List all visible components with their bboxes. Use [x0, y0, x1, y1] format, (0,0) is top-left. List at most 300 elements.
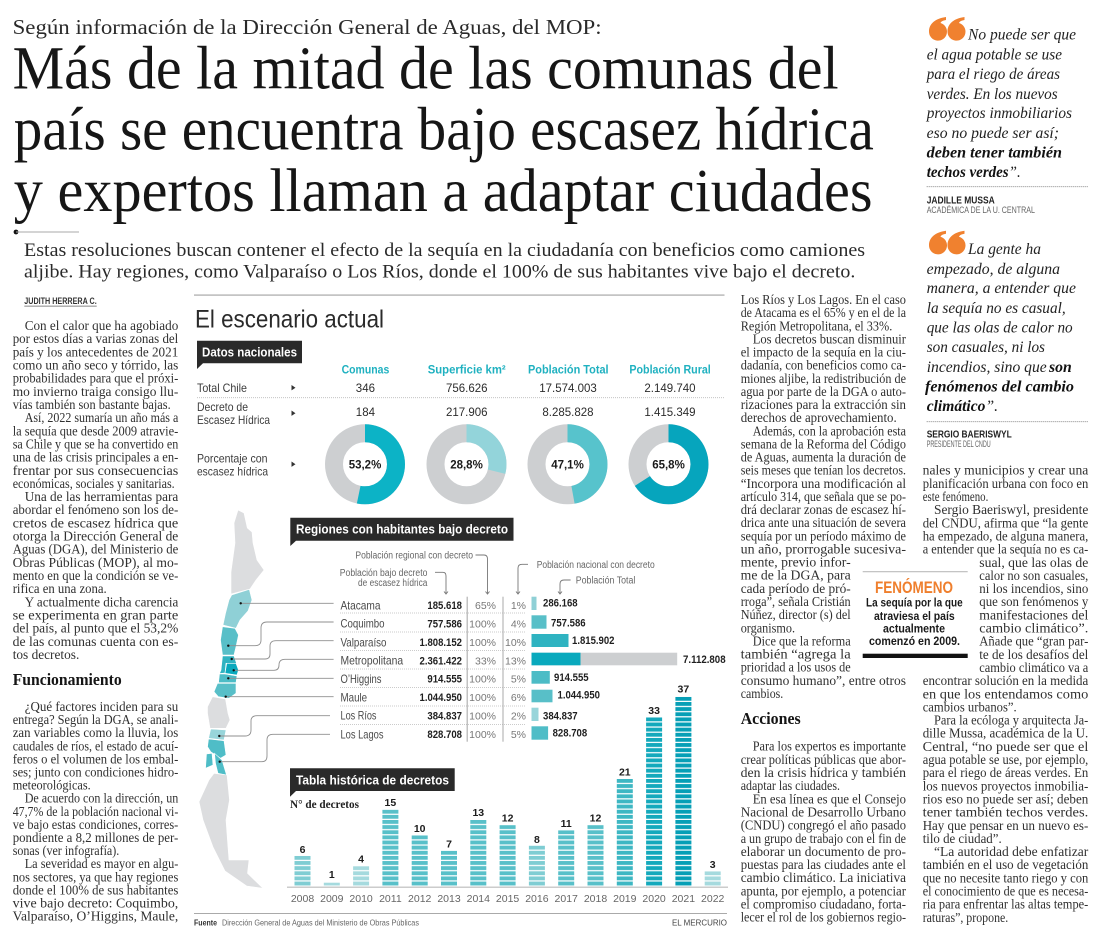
quote: Sergio Baeriswyl	[925, 231, 1088, 449]
article column 1: Así, 2022 sumaría un año más a	[25, 410, 178, 425]
quote: Sergio Baeriswyl: manera, a entender que	[927, 280, 1076, 297]
article column 4: cambio climático va a	[979, 660, 1088, 675]
tag: Regiones con habitantes bajo decreto	[290, 518, 514, 546]
row: Total Chile: 17.574.003	[539, 383, 597, 395]
donut: población rural 65,8%: 65,8%	[652, 459, 685, 471]
article column 1: sa Chile y que se ha convertido en	[13, 436, 179, 451]
byline: JUDITH HERRERA C.	[24, 296, 97, 307]
article column 4: manifestaciones del	[979, 607, 1089, 622]
bar chart: decretos 2008-2022: 2018	[584, 893, 607, 905]
row label: Porcentaje con escasez hídrica: Porcentaje con	[197, 452, 268, 466]
article column 4: para el riego de áreas verdes. En	[923, 765, 1089, 780]
quote: Sergio Baeriswyl: incendios, sino que	[927, 359, 1047, 376]
subtitle: Estas resoluciones buscan contener el efecto de la sequía en la ciudadanía con beneficios como camiones	[24, 240, 865, 261]
regions table: Maule: 6%	[511, 692, 526, 704]
article column 4: agua potable se use, por ejemplo,	[923, 752, 1088, 767]
article column 4: a entender que la sequía no es ca-	[923, 542, 1089, 557]
row: Total Chile: 346	[356, 383, 375, 395]
row: Decreto de Escasez Hídrica	[197, 400, 696, 427]
infographic heading: El escenario actual	[195, 306, 384, 334]
regions table: Metropolitana: 13%	[505, 655, 526, 667]
article column 3: Región Metropolitana, el 33%.	[741, 318, 892, 333]
article column 1: del país, al punto que el 53,2%	[13, 621, 178, 636]
article column 4: raturas”, propone.	[923, 910, 1008, 925]
article column 1, second section: meteorológicas.	[13, 778, 91, 793]
bar chart: decretos 2008-2022: 13	[472, 807, 484, 819]
bar chart: decretos 2008-2022: 2019	[613, 893, 637, 905]
bar chart: decretos 2008-2022: 2020	[642, 893, 666, 905]
article column 4: ni los incendios, sino	[979, 581, 1089, 596]
article column 1: Aguas (DGA), del Ministerio de	[13, 542, 178, 557]
article column 1, second section: Valparaíso, O’Higgins, Maule,	[13, 909, 178, 924]
article column 3	[741, 292, 907, 701]
icon: orange quotation mark	[929, 17, 965, 41]
quote: Sergio Baeriswyl: que las olas de calor no	[927, 320, 1073, 336]
callout: Fenómeno: La sequía por la que	[866, 597, 963, 609]
regions table: Los Ríos: 100%	[469, 710, 496, 722]
column notes and arrows: Población regional con decreto	[355, 550, 473, 562]
article column 3: agua por parte de la DGA o auto-	[741, 384, 906, 399]
bar chart: decretos 2008-2022: 1	[329, 869, 335, 881]
icon: orange quotation mark	[929, 231, 965, 254]
article column 1, second section	[13, 699, 179, 924]
regions table: O'Higgins: 914.555	[554, 672, 589, 684]
article column 3, second section: (CNDU) congregó el año pasado	[741, 818, 906, 833]
quote: Jadille Mussa: JADILLE MUSSA	[927, 196, 995, 207]
subtitle	[24, 240, 865, 282]
regions table: Atacama: 286.168	[543, 598, 578, 610]
title	[13, 35, 874, 234]
regions table: Coquimbo: Coquimbo	[340, 617, 385, 631]
callout: Fenómeno: comenzó en 2009.	[869, 636, 960, 648]
article column 3: consumo humano”, entre otros	[741, 673, 906, 688]
article column 1: mo invierno traiga consigo llu-	[13, 384, 179, 399]
bar chart: decretos 2008-2022: 37	[678, 684, 689, 696]
bar chart: decretos 2008-2022: 2021	[672, 893, 695, 905]
callout: Fenómeno: FENÓMENO	[875, 578, 953, 597]
article column 3: Núñez, director (s) del	[741, 607, 851, 622]
article column 4: nales y municipios y crear una	[923, 463, 1088, 478]
regions table: O'Higgins: O’Higgins	[340, 672, 382, 686]
quote: Jadille Mussa: eso no puede ser así;	[927, 125, 1059, 142]
column notes and arrows: Población bajo decreto	[340, 568, 428, 579]
article column 3, second section: adaptar las ciudades.	[741, 778, 840, 793]
row: Decreto de Escasez Hídrica: 217.906	[446, 407, 488, 419]
bar chart: decretos 2008-2022: 4	[358, 854, 364, 866]
article column 1, second section: entrega? Según la DGA, se anali-	[13, 712, 179, 727]
tag: Datos nacionales: Datos nacionales	[202, 344, 297, 360]
callout: Fenómeno: atraviesa el país	[874, 611, 955, 623]
source line: EL MERCURIO	[672, 918, 727, 928]
article column 1, second section: caudales de ríos, el estado de acuí-	[13, 738, 179, 753]
article column 3, second section: apunta, por ejemplo, a potenciar	[741, 883, 906, 898]
national data table headings	[342, 363, 711, 377]
row: Decreto de Escasez Hídrica: Decreto de	[197, 400, 248, 414]
article column 4: que no necesite tanto riego y con	[923, 870, 1089, 885]
regions table: Valparaíso: 1.808.152	[420, 637, 462, 649]
regions table: O'Higgins	[340, 671, 589, 686]
regions table: O'Higgins: 100%	[469, 674, 496, 686]
article column 3, second section: En esa línea es que el Consejo	[753, 791, 906, 806]
article column 3: rizaciones para la extracción sin	[741, 397, 906, 412]
quote: Jadille Mussa: el agua potable se use	[927, 46, 1062, 64]
regions table: Atacama	[340, 597, 578, 612]
regions table: Metropolitana: 33%	[475, 655, 496, 667]
article column 1, second section: nos sectores, ya que hay regiones	[13, 869, 178, 884]
donut: superficie 28,8%: 28,8%	[450, 459, 483, 471]
column notes and arrows: de escasez hídrica	[358, 578, 428, 589]
article column 3: el impacto de la sequía en la ciu-	[741, 344, 906, 360]
article column 3: artículo 314, que señala que se po-	[741, 489, 906, 504]
article column 3, second section: lecer el rol de los gobiernos regio-	[741, 910, 906, 925]
article column 3, second section: cambio climático. La iniciativa	[741, 870, 906, 885]
quote: Jadille Mussa: No puede ser que	[967, 26, 1076, 44]
map region markers	[218, 602, 242, 763]
quote: Sergio Baeriswyl: climático”.	[927, 398, 998, 415]
row label: Porcentaje con escasez hídrica	[197, 452, 296, 479]
map connector lines	[219, 603, 334, 762]
title: país se encuentra bajo escasez hídrica	[14, 96, 874, 163]
bar chart: decretos 2008-2022: 2012	[408, 893, 432, 905]
donut: población rural 65,8%	[638, 433, 700, 495]
article column 1, second section: zan variables como la lluvia, los	[13, 725, 178, 740]
donut: población total 47,1%	[536, 433, 598, 495]
bar chart: decretos 2008-2022: 6	[300, 844, 306, 856]
article column 1, second section: ¿Qué factores inciden para su	[25, 699, 179, 714]
article column 4: rios eso no puede ser así; deben	[923, 792, 1089, 806]
article column 3: drá declarar zonas de escasez hí-	[741, 502, 906, 517]
article column 3: de Atacama es el 65% y en el de la	[741, 305, 906, 320]
article column 1, second section: 47,7% de la población nacional vi-	[13, 804, 179, 819]
article column 1: de las comunas cuenta con es-	[13, 634, 179, 649]
article column 1: rifica en una zona.	[13, 581, 107, 596]
bar chart: decretos 2008-2022: 15	[385, 797, 396, 809]
article column 4	[923, 463, 1089, 925]
article column 3, second section: den la crisis hídrica y también	[741, 765, 906, 780]
regions table: Los Lagos	[340, 726, 587, 741]
article column 1: una de las crisis principales a en-	[13, 450, 179, 465]
column notes and arrows	[340, 550, 655, 594]
article column 4: los nuevos proyectos inmobilia-	[923, 778, 1089, 793]
regions table: Metropolitana	[340, 653, 726, 668]
regions table: Metropolitana: 2.361.422	[420, 655, 462, 667]
article column 3, second section: puestas para las ciudades ante el	[741, 857, 906, 872]
article column 1: probabilidades para que el próxi-	[13, 371, 179, 386]
bar chart: decretos 2008-2022: 8	[534, 834, 540, 846]
article column 3: rroga”, señala Cristián	[741, 594, 851, 609]
kicker: Según información de la Dirección General de Aguas, del MOP:	[13, 15, 602, 39]
regions table: Los Lagos: Los Lagos	[340, 727, 384, 741]
regions table: Coquimbo	[340, 615, 586, 631]
article column 3: dadanía, con beneficios como ca-	[741, 358, 906, 373]
article column 1, second section: La severidad es mayor en algu-	[25, 856, 179, 871]
row: Decreto de Escasez Hídrica: 1.415.349	[644, 407, 696, 419]
article column 3: drica ante una situación de severa	[741, 515, 906, 530]
quote: Jadille Mussa	[926, 17, 1088, 215]
article column 3, second section: a un grupo de trabajo con el fin de	[741, 831, 906, 846]
regions table: Coquimbo: 757.586	[551, 617, 586, 629]
column notes and arrows: Población Total	[576, 576, 635, 586]
bar chart: decretos 2008-2022: 2008	[291, 893, 314, 905]
panel: infographic	[194, 294, 728, 927]
row: Total Chile: 2.149.740	[644, 383, 696, 395]
bar chart: decretos 2008-2022: 12	[590, 812, 601, 824]
article column 3, second section: elaborar un documento de pro-	[741, 844, 906, 859]
national data table headings: Población Total	[528, 363, 609, 377]
national data table headings: Comunas	[342, 363, 390, 377]
article column 1, second section: feros o el volumen de los embal-	[13, 751, 179, 766]
article column 1: tos decretos.	[13, 647, 79, 662]
quote: Jadille Mussa: deben tener también	[927, 144, 1062, 162]
article column 4: tener también techos verdes.	[923, 805, 1088, 820]
article column 4: encontrar solución en la medida	[923, 673, 1088, 688]
callout: Fenómeno	[863, 571, 968, 658]
bar chart: decretos 2008-2022: 2013	[437, 893, 461, 905]
quote: Jadille Mussa: proyectos inmobiliarios	[926, 105, 1072, 122]
tag: Tabla histórica de decretos	[290, 768, 455, 797]
regions table: O'Higgins: 914.555	[427, 674, 462, 686]
row label: Porcentaje con escasez hídrica: escasez hídrica	[197, 465, 268, 479]
regions table: Metropolitana: Metropolitana	[340, 654, 403, 668]
quote: Sergio Baeriswyl: fenómenos del cambio	[925, 378, 1074, 396]
article column 1: cretos de escasez hídrica que	[13, 515, 178, 530]
bar chart: decretos 2008-2022: 2009	[320, 893, 344, 905]
article column 1: se experimenta en gran parte	[13, 608, 178, 622]
article column 1: frentar por sus consecuencias	[13, 463, 178, 478]
heading: Funcionamiento: Funcionamiento	[13, 670, 122, 689]
bar chart: decretos 2008-2022	[287, 684, 728, 905]
article column 3: sequía por un período máximo de	[741, 528, 906, 543]
article column 4: tilo de ciudad”.	[923, 831, 1002, 846]
regions table: Atacama: 1%	[511, 600, 526, 612]
article column 1: Una de las herramientas para	[25, 489, 178, 504]
article column 4: ria para enfrentar las altas tempe-	[923, 897, 1089, 912]
row: Decreto de Escasez Hídrica: Escasez Hídrica	[197, 413, 270, 427]
article column 4: Hay que pensar en un nuevo es-	[923, 818, 1089, 833]
article column 3: Los decretos buscan disminuir	[753, 331, 906, 346]
article column 3: Los Ríos y Los Lagos. En el caso	[741, 292, 906, 307]
article column 3: un año, prorrogable sucesiva-	[741, 542, 907, 556]
article column 4: planificación urbana con foco en	[923, 476, 1089, 491]
regions table: Maule: 100%	[469, 692, 496, 704]
regions table: Maule	[340, 690, 600, 704]
quote: Sergio Baeriswyl: empezado, de alguna	[927, 261, 1060, 278]
quote: Jadille Mussa: verdes. En los nuevos	[927, 86, 1058, 103]
regions table: Coquimbo: 4%	[511, 618, 526, 630]
article column 4: “La autoridad debe enfatizar	[934, 844, 1089, 859]
article column 3: semana de la Reforma del Código	[741, 436, 906, 451]
bar chart: decretos 2008-2022: 2011	[379, 893, 402, 905]
quote: Sergio Baeriswyl: son	[1048, 359, 1072, 376]
bar chart: decretos 2008-2022: 10	[414, 823, 426, 835]
article column 3, second section: Nacional de Desarrollo Urbano	[741, 804, 906, 820]
article column 3: prioridad a los usos de	[741, 660, 851, 675]
regions table: Coquimbo: 757.586	[427, 618, 462, 630]
bar chart: decretos 2008-2022: 3	[710, 859, 716, 871]
regions table: Los Ríos	[340, 708, 578, 723]
quote: Jadille Mussa: techos verdes”.	[927, 164, 1021, 181]
bar chart: decretos 2008-2022: 33	[648, 705, 660, 717]
regions table: Valparaíso: 1.815.902	[572, 635, 614, 647]
article column 4: cambios urbanos”.	[923, 699, 1017, 714]
row: Total Chile	[197, 381, 696, 395]
article column 3: Además, con la aprobación esta	[753, 423, 906, 438]
article column 3: derechos de aprovechamiento.	[741, 410, 897, 425]
article column 3: de Aguas, aumenta la duración de	[741, 450, 906, 465]
map of Chile	[199, 510, 264, 888]
article column 4: este fenómeno.	[923, 489, 988, 504]
article column 1: abordar el fenómeno son los de-	[13, 502, 179, 517]
subtitle: aljibe. Hay regiones, como Valparaíso o Los Ríos, donde el 100% de sus habitantes vive bajo el decreto.	[24, 262, 855, 282]
article column 3: también “agrega la	[741, 646, 851, 662]
regions table: Los Ríos: 2%	[511, 710, 526, 722]
article column 3: me de la DGA, para	[741, 568, 851, 583]
regions table: Los Ríos: 384.837	[543, 710, 578, 722]
heading: Acciones: Acciones	[741, 709, 801, 728]
source line	[194, 913, 727, 928]
article column 3, second section	[741, 739, 906, 925]
quote: Sergio Baeriswyl: SERGIO BAERISWYL	[927, 430, 1012, 441]
regions table: Valparaíso: 100%	[469, 637, 496, 649]
bar chart: decretos 2008-2022: 12	[502, 812, 514, 824]
article column 4: dille Mussa, académica de la U.	[923, 726, 1088, 741]
article column 4: sual, que las olas de	[979, 555, 1088, 570]
article column 1	[13, 318, 179, 662]
article column 1: Y actualmente dicha carencia	[25, 594, 178, 609]
article column 3, second section: el compromiso ciudadano, forta-	[741, 896, 906, 912]
title: Más de la mitad de las comunas del	[13, 35, 839, 102]
article column 4: del CNDU, afirma que “la gente	[923, 515, 1088, 530]
article column 1, second section: ve bajo estas condiciones, corres-	[13, 817, 179, 832]
article column 1: la sequía que desde 2009 atravie-	[13, 423, 179, 438]
regions table: Los Ríos: Los Ríos	[340, 709, 376, 723]
regions table: Los Lagos: 828.708	[553, 728, 587, 740]
article column 3: miones aljibe, la redistribución de	[741, 371, 906, 386]
quote: Sergio Baeriswyl: La gente ha	[967, 241, 1041, 258]
regions table: Los Lagos: 828.708	[427, 729, 462, 741]
regions table: Atacama: Atacama	[340, 598, 381, 612]
donut: superficie 28,8%	[436, 433, 498, 495]
regions table: Coquimbo: 100%	[469, 618, 496, 630]
article column 1, second section: ses; junto con condiciones hidro-	[13, 764, 179, 780]
regions table: Maule: 1.044.950	[558, 690, 600, 702]
row: Total Chile: Total Chile	[197, 381, 247, 395]
article column 1, second section: De acuerdo con la dirección, un	[25, 791, 179, 806]
tag: Tabla histórica de decretos: Tabla histórica de decretos	[296, 772, 449, 788]
article column 1: vías también son bastante bajas.	[13, 397, 171, 412]
regions table: Atacama: 185.618	[427, 600, 462, 612]
donut: comunas 53,2%: 53,2%	[349, 459, 381, 471]
bar chart: decretos 2008-2022: 2015	[496, 893, 519, 905]
quote: Sergio Baeriswyl: son casuales, ni los	[927, 339, 1045, 356]
article column 3: “Incorpora una modificación al	[741, 476, 906, 491]
regions table: O'Higgins: 5%	[511, 674, 526, 686]
article column 3: seis meses que tenían los decretos.	[741, 463, 906, 478]
bar chart: decretos 2008-2022: 2010	[349, 893, 373, 905]
regions table: Valparaíso: Valparaíso	[340, 635, 387, 649]
article column 1, second section: donde el 100% de sus habitantes	[13, 882, 178, 897]
tag: Datos nacionales	[197, 341, 302, 369]
bar chart: decretos 2008-2022: 21	[619, 766, 631, 778]
article column 3: cambios.	[741, 686, 783, 701]
article column 4: Central, “no puede ser que el	[923, 739, 1089, 754]
column notes and arrows: Población nacional con decreto	[537, 560, 655, 571]
regions table: Atacama: 65%	[475, 600, 496, 612]
article column 4: Sergio Baeriswyl, presidente	[934, 502, 1088, 517]
quote: Jadille Mussa: ACADÉMICA DE LA U. CENTRAL	[927, 205, 1035, 215]
donut: población total 47,1%: 47,1%	[551, 459, 584, 471]
article column 3: cada período de pró-	[741, 581, 851, 596]
bar chart: decretos 2008-2022: 7	[446, 838, 452, 850]
article column 4: cambio climático”.	[979, 620, 1088, 636]
quote: Jadille Mussa: para el riego de áreas	[926, 66, 1060, 83]
article column 4: ha empezado, de alguna manera,	[923, 528, 1088, 544]
bar chart: decretos 2008-2022: 2016	[525, 893, 549, 905]
article column 4: Para la ecóloga y arquitecta Ja-	[934, 713, 1089, 728]
article column 1: otorga la Dirección General de	[13, 529, 178, 544]
dotted row lines	[340, 613, 526, 724]
article column 4: te de los desafíos del	[979, 647, 1089, 662]
tag: Regiones con habitantes bajo decreto: Regiones con habitantes bajo decreto	[296, 522, 508, 536]
article column 4: que son fenómenos y	[979, 594, 1089, 609]
regions table: Los Ríos: 384.837	[427, 710, 462, 722]
regions table: Metropolitana: 7.112.808	[683, 654, 726, 666]
source line: Fuente	[194, 918, 217, 928]
article column 1: país y los antecedentes de 2021	[13, 344, 178, 359]
article column 4: también en el uso de vegetación	[923, 857, 1089, 872]
regions table: Valparaíso: 10%	[505, 637, 526, 649]
donut: comunas 53,2%	[334, 433, 396, 495]
article column 3, second section: Para los expertos es importante	[753, 739, 906, 754]
article column 3, second section: crear políticas públicas que abor-	[741, 752, 906, 767]
article column 3: organismo.	[741, 620, 795, 635]
article column 1, second section: vive bajo decreto: Coquimbo,	[13, 896, 178, 910]
article column 1: como un año seco y tórrido, las	[13, 358, 178, 372]
article column 1: Con el calor que ha agobiado	[25, 318, 179, 333]
article column 4: calor no son casuales,	[979, 568, 1088, 583]
row: Decreto de Escasez Hídrica: 8.285.828	[542, 407, 594, 419]
national data table headings: Población Rural	[629, 363, 711, 377]
regions table: Valparaíso	[340, 634, 614, 649]
article column 3: mente, previo infor-	[741, 555, 851, 570]
regions table: Maule: 1.044.950	[420, 692, 462, 704]
national data table headings: Superficie km²	[428, 363, 506, 377]
article column 1: por estos días a varias zonas del	[13, 331, 179, 346]
article column 1: mento en que la condición se ve-	[13, 568, 179, 583]
article column 1: económicas, sociales y sanitarias.	[13, 476, 175, 491]
bar chart: decretos 2008-2022: 2022	[701, 893, 725, 905]
regions table: Los Lagos: 100%	[469, 729, 496, 741]
row: Decreto de Escasez Hídrica: 184	[356, 407, 376, 419]
article column 4: en que los entendamos como	[923, 686, 1089, 701]
article column 1, second section: pondiente a 8,2 millones de per-	[13, 830, 179, 845]
bar chart: decretos 2008-2022: 2014	[467, 893, 490, 905]
regions table: Los Lagos: 5%	[511, 729, 526, 741]
title: y expertos llaman a adaptar ciudades	[14, 158, 873, 225]
row: Total Chile: 756.626	[446, 383, 488, 395]
article column 4: Añade que “gran par-	[979, 634, 1089, 649]
regions table: Maule: Maule	[340, 690, 367, 704]
bar chart: decretos 2008-2022: 11	[561, 818, 572, 830]
quote: Sergio Baeriswyl: la sequía no es casual,	[927, 300, 1066, 317]
article column 3: Dice que la reforma	[753, 633, 851, 648]
source line: Dirección General de Aguas del Ministerio de Obras Públicas	[222, 918, 419, 928]
article column 1: Obras Públicas (MOP), al mo-	[13, 555, 179, 570]
bar chart: decretos 2008-2022: 2017	[555, 893, 578, 905]
callout: Fenómeno: actualmente	[883, 623, 945, 635]
quote: Sergio Baeriswyl: PRESIDENTE DEL CNDU	[927, 439, 991, 449]
article column 1, second section: sonas (ver infografía).	[13, 843, 119, 858]
